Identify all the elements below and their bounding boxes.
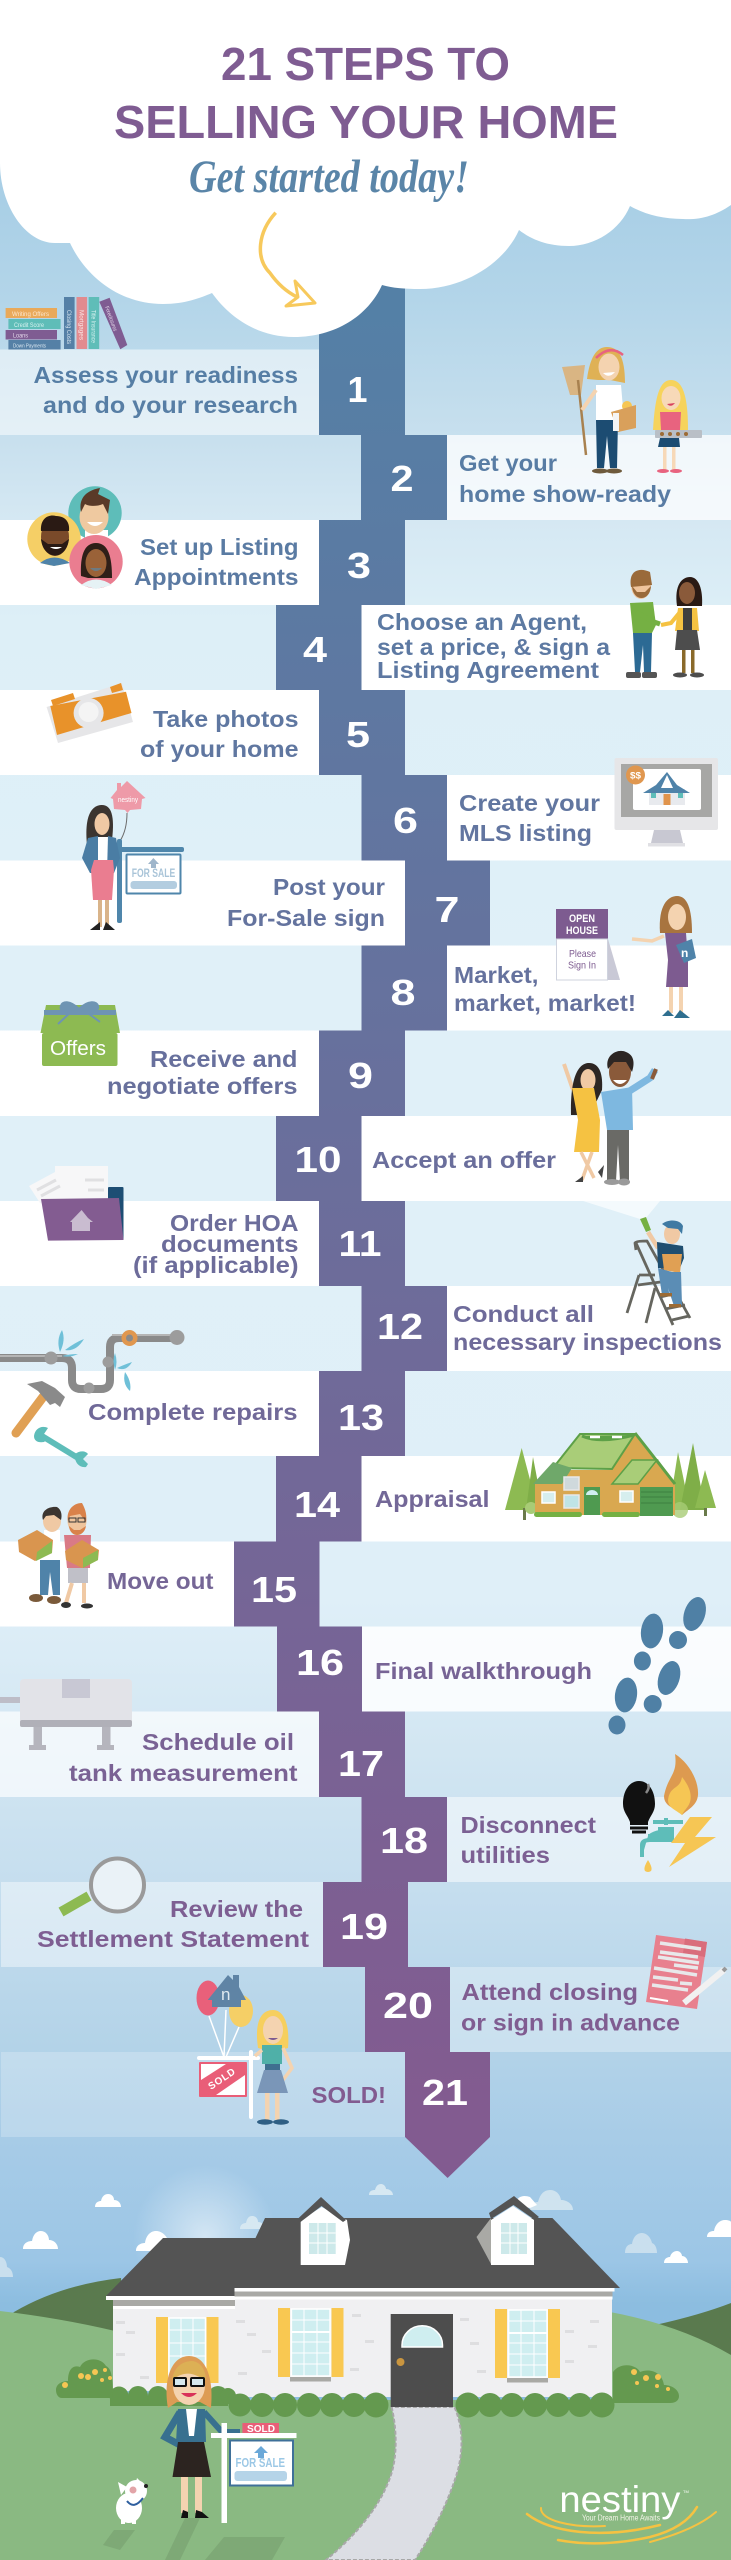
- icon: books: Foreclosures: [103, 306, 118, 332]
- step numbers: 16: [296, 1642, 344, 1683]
- title: [114, 38, 618, 148]
- icon: utilities: [623, 1754, 716, 1872]
- icon: books: Writing Offers: [12, 311, 50, 318]
- scene: sun glow: [133, 2165, 277, 2309]
- step labels: Appraisal: [375, 1486, 490, 1512]
- step numbers: 1: [348, 369, 368, 410]
- icon: open house sign and agent: [556, 896, 696, 1018]
- icon: magnifying glass: [61, 1858, 144, 1912]
- step labels: Review the: [170, 1896, 303, 1922]
- scene: house: [106, 2196, 620, 2418]
- step labels: documents: [161, 1231, 298, 1257]
- scene: dog: [116, 2478, 148, 2524]
- icon: appraisal house with trees: [505, 1433, 716, 1520]
- icon: HOA documents folder: [29, 1166, 124, 1241]
- icon: books: [6, 297, 127, 350]
- icon: open house sign and agent: Please: [569, 948, 596, 960]
- icon: balloons and sold sign with woman: SOLD: [207, 2067, 238, 2092]
- subtitle: Get started today!: [189, 151, 469, 203]
- icon: books: Closing Costs: [65, 310, 72, 345]
- scene: left flowering bush: [56, 2359, 113, 2398]
- step numbers: 7: [434, 889, 460, 930]
- scene: sold sign: SOLD: [247, 2424, 275, 2435]
- step labels: negotiate offers: [107, 1073, 298, 1099]
- cloud: [0, 0, 731, 337]
- icon: balloons and sold sign with woman: n: [221, 1985, 230, 2004]
- icon: open house sign and agent: OPEN: [569, 913, 595, 925]
- step labels: utilities: [460, 1842, 550, 1868]
- step labels: Market,: [454, 962, 538, 988]
- scene: agent woman: [165, 2356, 240, 2518]
- step labels: Schedule oil: [142, 1729, 294, 1755]
- icon: contract and pen: [646, 1935, 726, 2009]
- step labels: Settlement Statement: [37, 1926, 309, 1952]
- logo: nestiny: Your Dream Home Awaits: [582, 2514, 660, 2522]
- title: SELLING YOUR HOME: [114, 96, 618, 148]
- step numbers: 20: [383, 1985, 433, 2026]
- step numbers: 14: [294, 1484, 340, 1525]
- icon: offers gift box: [40, 1002, 120, 1066]
- icon: books: Credit Score: [14, 322, 44, 329]
- step labels: market, market!: [454, 990, 636, 1016]
- icon: offers gift box: Offers: [50, 1038, 106, 1060]
- step labels: of your home: [140, 736, 298, 762]
- step numbers: 6: [393, 800, 418, 841]
- step labels: For-Sale sign: [227, 905, 385, 931]
- scene: sold sign: [211, 2423, 296, 2523]
- icon: camera: [47, 683, 133, 743]
- step numbers: 9: [348, 1055, 373, 1096]
- main window right: [495, 2309, 560, 2382]
- scene: sold sign: FOR SALE: [236, 2455, 285, 2470]
- step numbers: 2: [390, 458, 414, 499]
- hedges: [110, 2386, 614, 2418]
- step labels: Disconnect: [460, 1812, 596, 1838]
- icon: woman with balloon and for-sale sign: nestiny: [118, 797, 138, 804]
- scene: front lawn: [0, 2311, 731, 2560]
- house roof: [106, 2218, 620, 2296]
- logo: nestiny: nestiny: [559, 2479, 681, 2520]
- step numbers: 5: [346, 714, 370, 755]
- ladder: [627, 1241, 690, 1325]
- icon: hammer: [16, 1381, 65, 1433]
- left wing window: [156, 2317, 218, 2388]
- icon: two movers with boxes: [18, 1503, 99, 1608]
- step labels: Move out: [107, 1568, 214, 1594]
- step labels: Complete repairs: [88, 1399, 298, 1425]
- panel: step bands: [0, 350, 731, 2137]
- left dormer: [296, 2197, 350, 2265]
- icon: leaking pipes: [0, 1330, 184, 1394]
- arrow: start here: [260, 213, 315, 306]
- icon: inspector on ladder: [583, 1201, 690, 1325]
- icon: happy couple: [564, 1051, 656, 1186]
- step labels: Conduct all: [453, 1301, 594, 1327]
- scene: back hills: [0, 2278, 731, 2365]
- step numbers: 21: [422, 2072, 468, 2113]
- step labels: necessary inspections: [453, 1329, 722, 1355]
- step numbers: 17: [338, 1743, 384, 1784]
- step numbers: 3: [347, 545, 371, 586]
- step labels: Choose an Agent,: [377, 609, 587, 635]
- step numbers: 12: [377, 1306, 423, 1347]
- step labels: Create your: [459, 790, 600, 816]
- step labels: and do your research: [43, 392, 298, 418]
- staircase column: [234, 270, 490, 2178]
- icon: books: Mortgages: [78, 310, 84, 341]
- step labels: tank measurement: [69, 1760, 298, 1786]
- icon: woman with balloon and for-sale sign: [82, 781, 184, 930]
- step labels: Post your: [273, 874, 385, 900]
- icon: oil tank: [0, 1679, 132, 1750]
- step numbers: 4: [303, 629, 327, 670]
- step labels: Assess your readiness: [34, 362, 298, 388]
- front door: [391, 2314, 453, 2407]
- step numbers: 19: [340, 1906, 388, 1947]
- step labels: or sign in advance: [461, 2010, 680, 2036]
- icon: MLS listing on monitor: $$: [630, 770, 641, 780]
- step labels: Listing Agreement: [377, 657, 599, 683]
- step labels: (if applicable): [133, 1252, 298, 1278]
- scene: right flowering bush: [613, 2365, 679, 2403]
- logo: nestiny: [527, 2479, 716, 2543]
- step labels: home show-ready: [459, 481, 671, 507]
- logo: nestiny: TM: [683, 2489, 689, 2494]
- house trim: [106, 2288, 614, 2309]
- icon: MLS listing on monitor: [614, 758, 718, 846]
- scene: lawn shadows: [103, 2518, 285, 2560]
- step labels: SOLD!: [312, 2082, 386, 2108]
- icon: books: Title Insurance: [90, 310, 96, 344]
- main window left: [278, 2308, 344, 2382]
- title: 21 STEPS TO: [221, 38, 510, 90]
- step labels: Order HOA: [170, 1210, 299, 1236]
- step numbers: 18: [380, 1820, 428, 1861]
- icon: woman with balloon and for-sale sign: FOR SALE: [132, 866, 175, 880]
- icon: woman with broom and girl with cookies: [562, 347, 702, 474]
- step numbers: 10: [294, 1139, 342, 1180]
- scene: small clouds: [0, 2184, 731, 2277]
- icon: footprints: [608, 1594, 710, 1734]
- icon: balloons and sold sign with woman: [196, 1975, 292, 2125]
- step numbers: 8: [390, 972, 416, 1013]
- icon: wrench: [34, 1427, 88, 1467]
- step labels: Accept an offer: [372, 1147, 556, 1173]
- step labels: Final walkthrough: [375, 1658, 592, 1684]
- step labels: Receive and: [150, 1046, 298, 1072]
- step labels: Take photos: [153, 706, 298, 732]
- icon: books: Loans: [13, 332, 29, 340]
- step labels: set a price, & sign a: [377, 634, 611, 660]
- icon: open house sign and agent: HOUSE: [566, 925, 598, 937]
- icon: open house sign and agent: Sign In: [568, 960, 596, 972]
- step numbers: [251, 369, 468, 2113]
- step labels: Appointments: [134, 564, 298, 590]
- step labels: [34, 362, 722, 2108]
- house walls: [113, 2297, 612, 2397]
- step labels: Attend closing: [462, 1979, 638, 2005]
- step labels: Get your: [459, 450, 557, 476]
- step labels: MLS listing: [459, 820, 592, 846]
- scene: path walkway: [326, 2407, 462, 2560]
- step labels: Set up Listing: [140, 534, 298, 560]
- step numbers: 11: [338, 1223, 382, 1264]
- icon: agent handshake: [626, 570, 704, 678]
- icon: open house sign and agent: n: [681, 946, 688, 960]
- icon: three people portraits: [27, 486, 123, 589]
- right dormer: [476, 2196, 539, 2265]
- step numbers: 13: [338, 1397, 384, 1438]
- step numbers: 15: [251, 1569, 297, 1610]
- icon: books: Down Payments: [13, 344, 46, 350]
